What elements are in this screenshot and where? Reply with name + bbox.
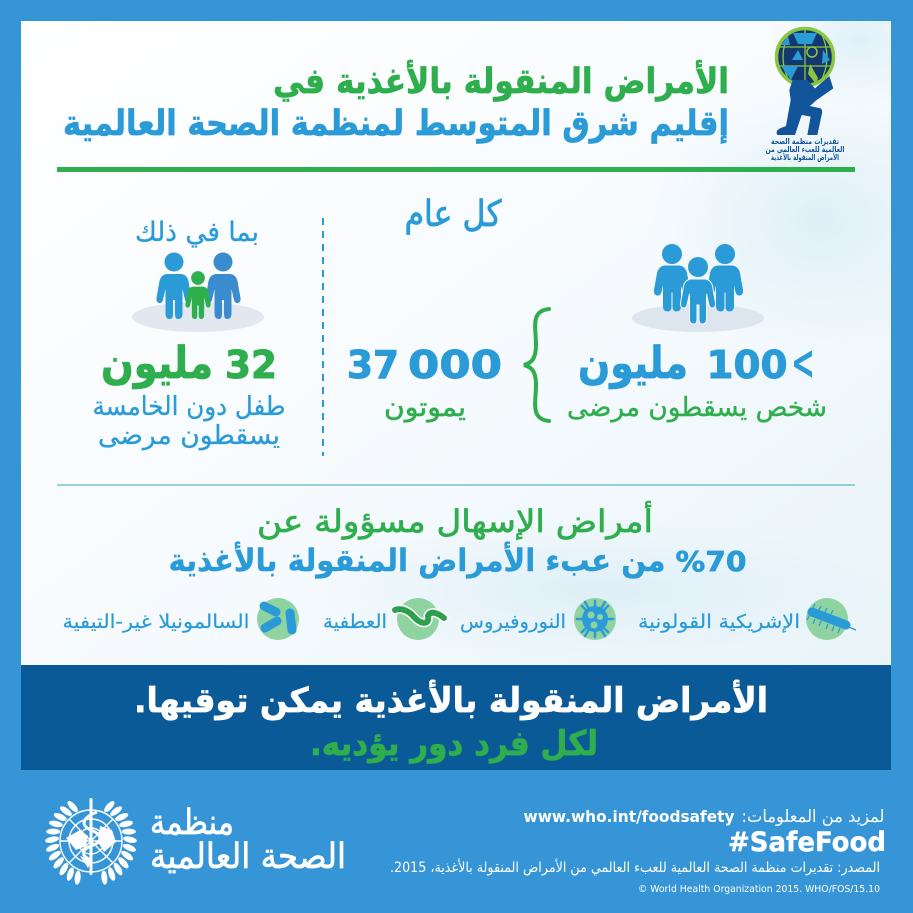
stat: 37000 deaths: يموتون bbox=[384, 393, 466, 423]
pathogen: norovirus: النوروفيروس bbox=[460, 611, 566, 633]
logo text: WHO name bbox=[150, 803, 346, 877]
copyright: © World Health Organization 2015. WHO/FOS/15.10 bbox=[638, 884, 880, 895]
number: 100: 100 bbox=[706, 343, 788, 387]
panel: main content bbox=[21, 0, 913, 666]
heading: every year: كل عام bbox=[404, 194, 502, 235]
caption: children under five: طفل دون الخامسة bbox=[92, 392, 286, 422]
pathogen: salmonella: السالمونيلا غير-التيفية bbox=[62, 611, 250, 633]
logo: WHO emblem bbox=[45, 798, 137, 885]
source: المصدر: تقديرات منظمة الصحة العالمية للعبء العالمي من الأمراض المنقولة بالأغذية، 2015. bbox=[390, 858, 880, 876]
pathogen: E. coli: الإشريكية القولونية bbox=[638, 611, 800, 633]
logo caption: الأمراض المنقولة بالأغذية bbox=[771, 152, 839, 163]
footer: more information bbox=[524, 807, 884, 827]
stat: 37000 deaths bbox=[347, 343, 502, 423]
number: 32: 32 bbox=[225, 343, 277, 387]
million: مليون bbox=[101, 338, 213, 389]
caption: children under five bbox=[92, 392, 286, 451]
pathogen: E. coli bbox=[638, 598, 856, 640]
title: إقليم شرق المتوسط لمنظمة الصحة العالمية bbox=[63, 104, 729, 144]
stat: 37000 deaths: 000 bbox=[408, 343, 502, 387]
icon: family bbox=[132, 252, 264, 332]
stat: 32 million children bbox=[92, 217, 286, 451]
logo text: WHO name: منظمة bbox=[150, 803, 234, 843]
pathogen: norovirus bbox=[460, 598, 616, 640]
icon: three people bbox=[632, 244, 764, 332]
caption: children under five: يسقطون مرضى bbox=[98, 421, 280, 451]
title bbox=[63, 59, 729, 144]
footer: more information: لمزيد من المعلومات: bbox=[742, 807, 884, 827]
logo caption: العالمية للعبء العالمي من bbox=[766, 145, 845, 154]
pathogen: campylobacter bbox=[323, 598, 444, 640]
heading: diarrhoeal diseases: أمراض الإسهال مسؤولة عن bbox=[257, 501, 653, 540]
label: including: بما في ذلك bbox=[135, 217, 259, 248]
hashtag: #SafeFood bbox=[728, 827, 886, 858]
brace bbox=[524, 309, 549, 421]
pathogen: salmonella bbox=[62, 598, 299, 640]
heading: diarrhoeal diseases: من عبء الأمراض المنقولة بالأغذية bbox=[168, 541, 666, 579]
heading: diarrhoeal diseases: %70 bbox=[676, 545, 746, 578]
heading: diarrhoeal diseases bbox=[168, 501, 746, 579]
dashed divider bbox=[322, 218, 324, 456]
band: call to action bbox=[21, 665, 891, 770]
band: call to action: الأمراض المنقولة بالأغذية يمكن توقيها. bbox=[134, 679, 768, 721]
title: الأمراض المنقولة بالأغذية في bbox=[273, 59, 729, 102]
million: مليون bbox=[578, 338, 688, 389]
symbol: more than: < bbox=[791, 335, 815, 391]
stat: 37000 deaths: 37 bbox=[347, 343, 399, 387]
logo caption: تقديرات منظمة الصحة bbox=[771, 137, 839, 146]
caption: people fall ill: شخص يسقطون مرضى bbox=[567, 393, 827, 423]
icon: global burden logo bbox=[776, 28, 834, 135]
logo caption bbox=[766, 137, 845, 163]
pathogen: campylobacter: العطفية bbox=[323, 611, 387, 633]
footer: more information: www.who.int/foodsafety bbox=[524, 807, 735, 826]
logo text: WHO name: الصحة العالمية bbox=[150, 837, 346, 877]
band: call to action: لكل فرد دور يؤديه. bbox=[310, 724, 598, 764]
stat: over 100 million fall ill bbox=[567, 244, 827, 423]
